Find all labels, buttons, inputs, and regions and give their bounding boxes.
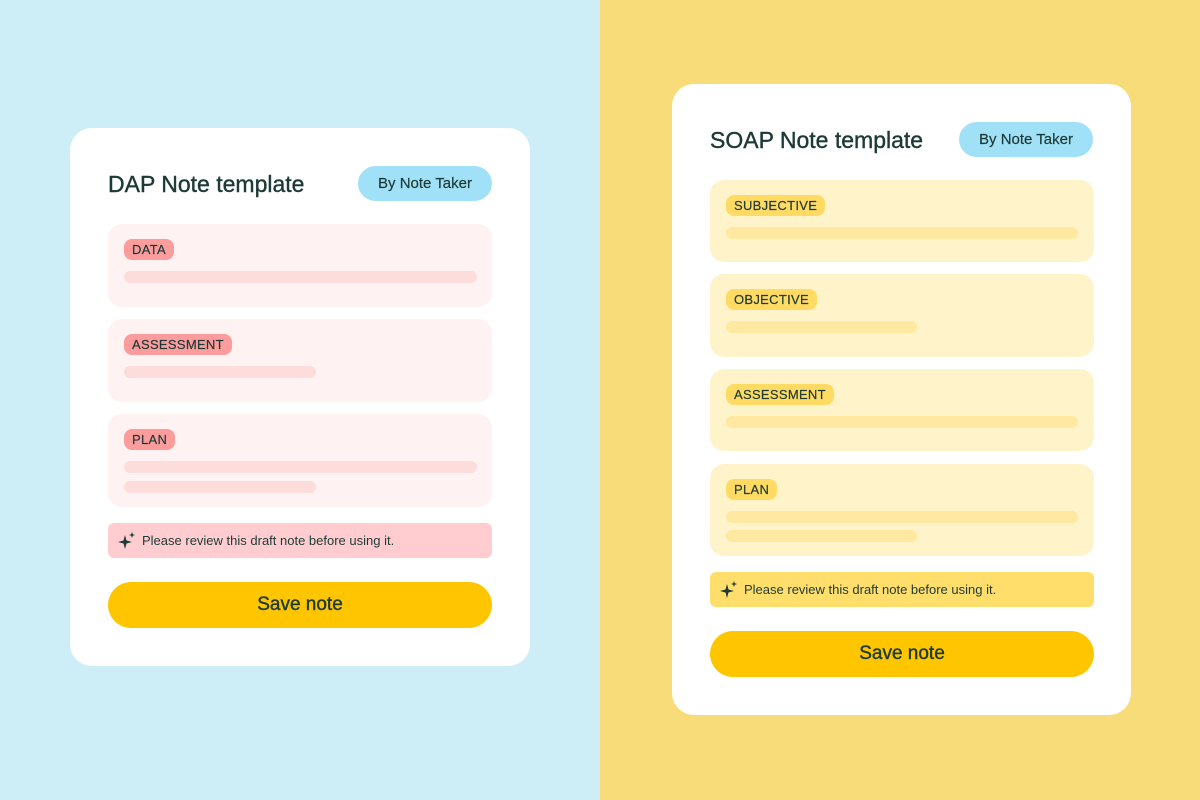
background left [0, 0, 600, 800]
section: assessment [108, 319, 492, 402]
callout: review warning [108, 523, 492, 558]
callout: review warning [710, 572, 1094, 607]
button: save note: Save note [257, 594, 343, 615]
background right [600, 0, 1200, 800]
button: save note [108, 582, 492, 628]
panel: DAP note card [70, 128, 530, 666]
callout: review warning: Please review this draft note before using it. [744, 582, 996, 597]
heading: SOAP Note template: SOAP Note template [710, 127, 923, 153]
section: plan: PLAN [132, 432, 167, 447]
section: plan: PLAN [734, 482, 769, 497]
section: plan [710, 464, 1094, 556]
pill: By Note Taker: By Note Taker [378, 175, 472, 192]
callout: review warning: Please review this draft note before using it. [142, 533, 394, 548]
heading: DAP Note template: DAP Note template [108, 171, 304, 197]
section: assessment: ASSESSMENT [132, 337, 224, 352]
section: data [108, 224, 492, 307]
panel: SOAP note card [672, 84, 1131, 715]
button: save note [710, 631, 1094, 677]
section: subjective: SUBJECTIVE [734, 198, 817, 213]
section: objective: OBJECTIVE [734, 292, 809, 307]
section: subjective [710, 180, 1094, 262]
section: data: DATA [132, 242, 166, 257]
pill: By Note Taker [959, 122, 1093, 157]
pill: By Note Taker: By Note Taker [979, 131, 1073, 148]
section: plan [108, 414, 492, 507]
pill: By Note Taker [358, 166, 492, 201]
button: save note: Save note [859, 643, 945, 664]
section: assessment [710, 369, 1094, 451]
section: assessment: ASSESSMENT [734, 387, 826, 402]
section: objective [710, 274, 1094, 357]
